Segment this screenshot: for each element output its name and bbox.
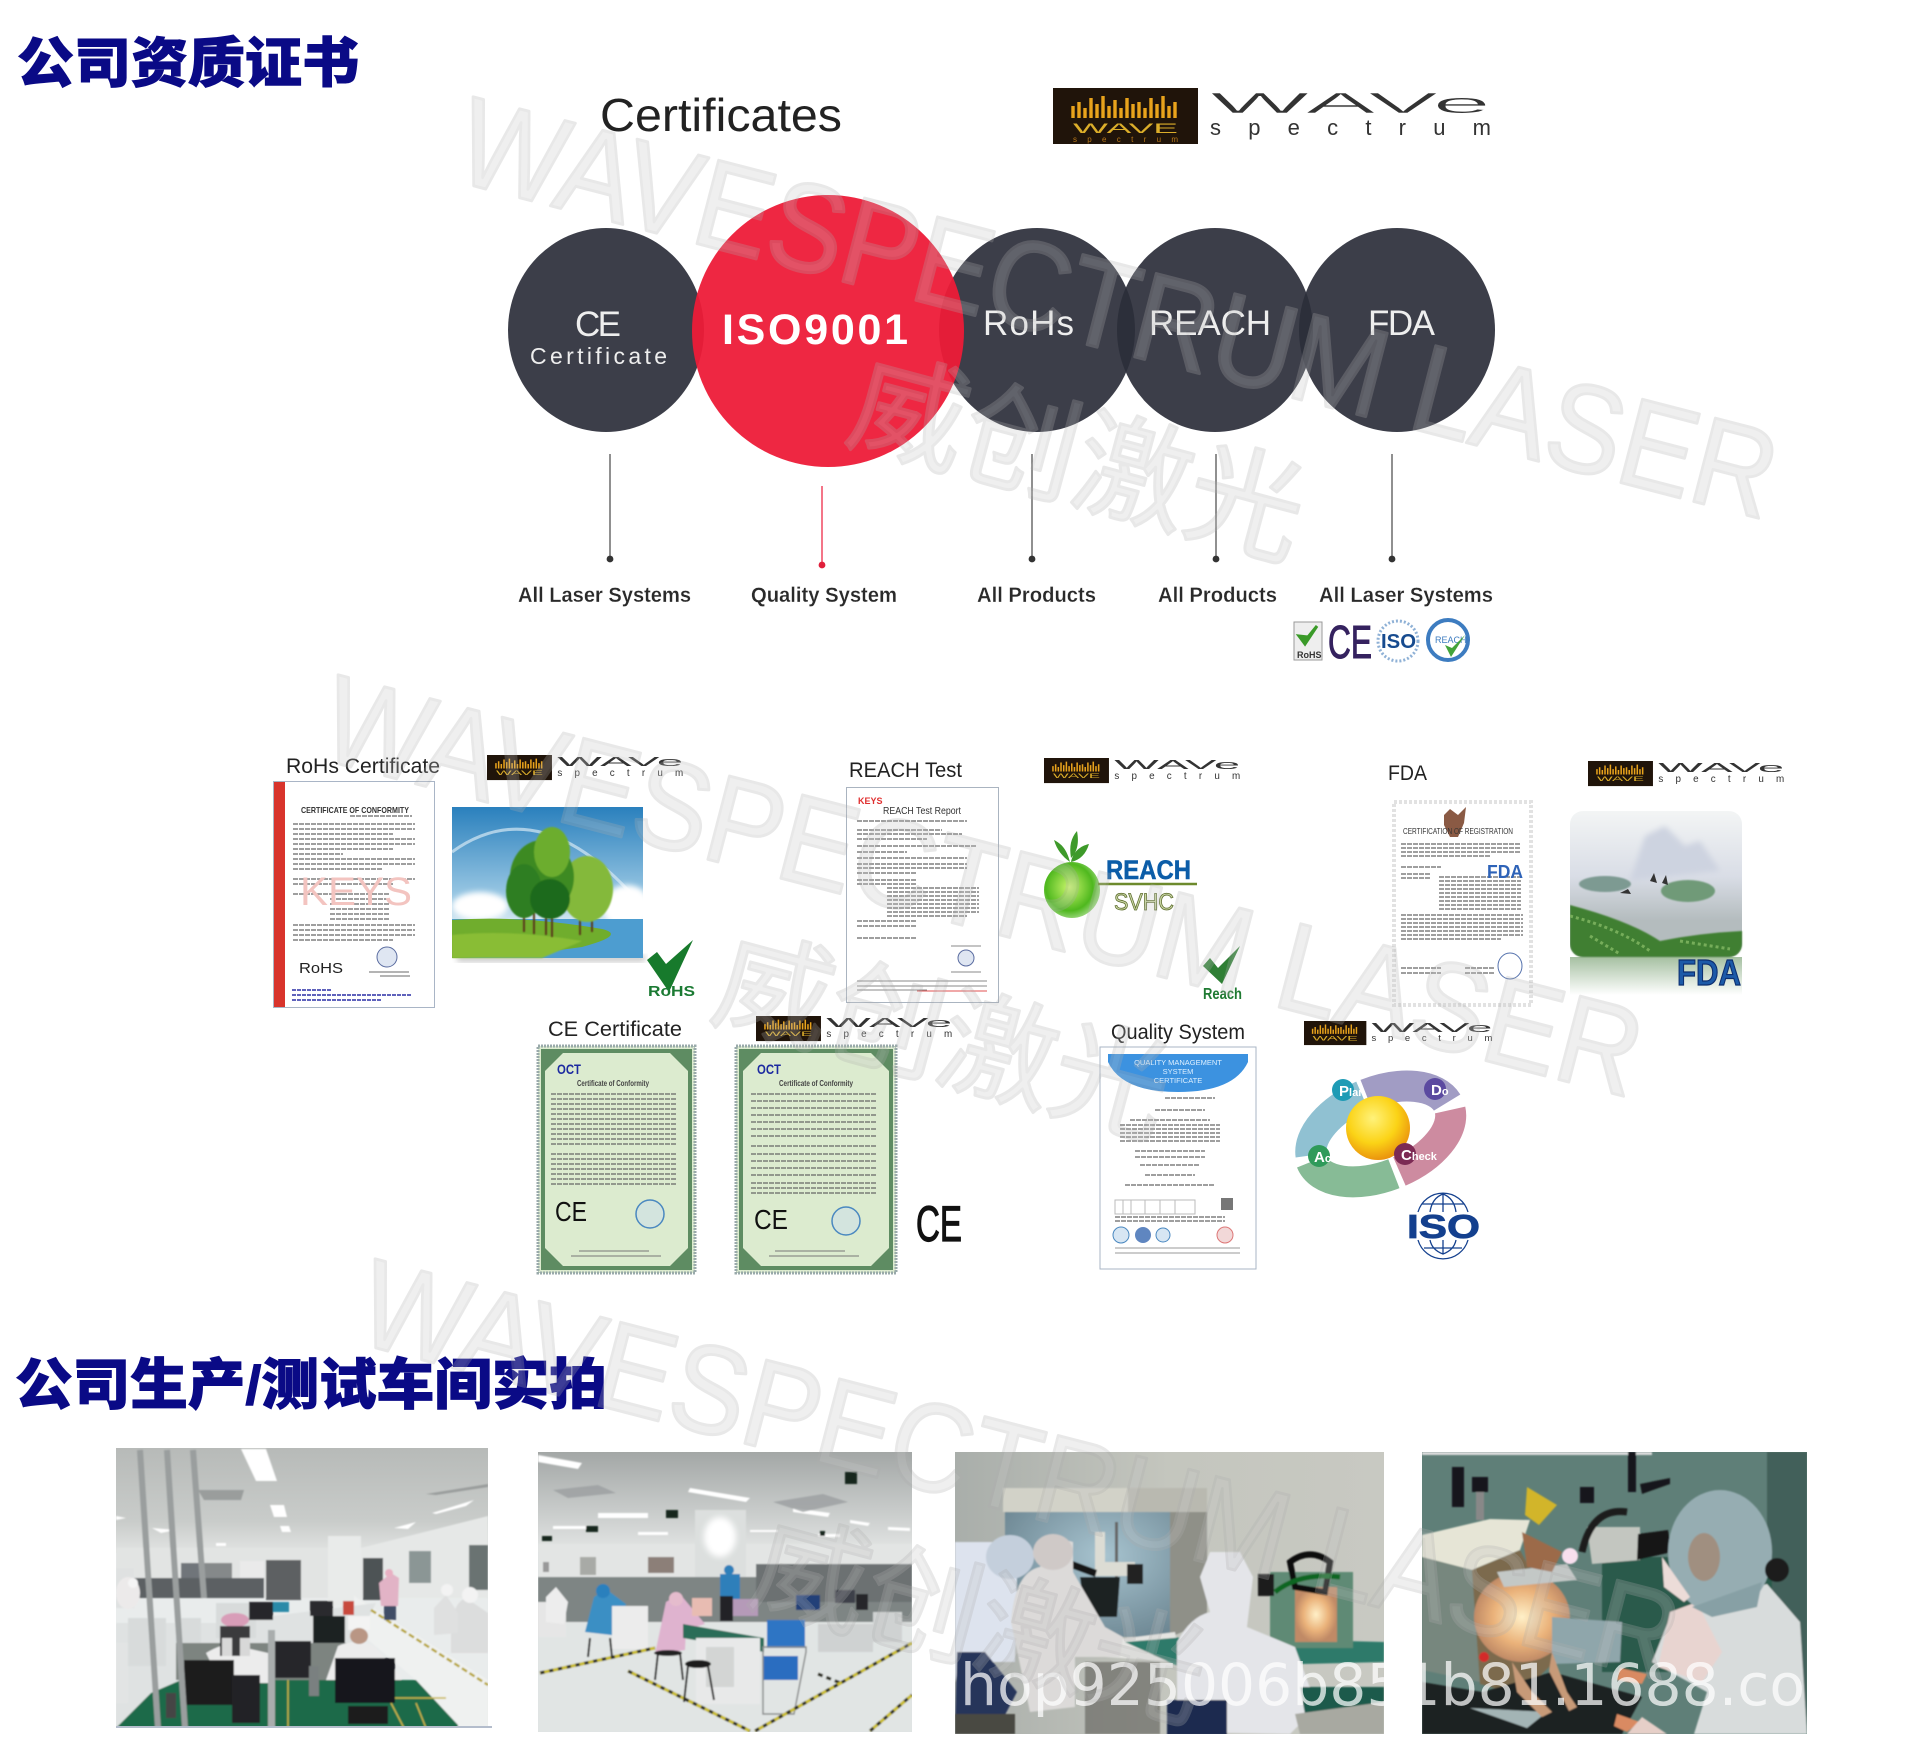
document: CE certificate one: OCT <box>557 1061 581 1077</box>
watermark: middle: WAVESPECTRUM LASER <box>309 650 1657 1124</box>
document: FDA certification of registration: CERTIFICATION OF REGISTRATION <box>1403 827 1513 836</box>
document: quality management system certificate: SYSTEM <box>1163 1067 1193 1076</box>
panel: REACH test <box>846 757 1242 1003</box>
document: CE certificate one: Certificate of Conformity <box>577 1079 649 1088</box>
watermark: top: WAVESPECTRUM LASER <box>444 72 1792 546</box>
document: CE certificate one <box>538 1046 695 1273</box>
photo: operator at laser bench <box>1422 1452 1807 1734</box>
document: CE certificate two <box>736 1046 896 1273</box>
document: RoHS certificate of conformity: KEYS <box>300 870 412 914</box>
icon: RoHS check <box>647 940 695 1000</box>
connector: ISO9001 <box>819 486 825 568</box>
logo: Wave Spectrum quality: WAVE <box>1313 1036 1358 1042</box>
watermark: shop url: hop925006b851b81.1688.co <box>960 1651 1805 1719</box>
logo: Wave Spectrum CE: WAVe <box>826 1015 952 1030</box>
document: RoHS certificate of conformity: RoHS <box>299 960 343 977</box>
circle: CE <box>508 228 704 432</box>
label: Quality System: Quality System <box>751 584 897 607</box>
document: REACH test report <box>846 788 998 1002</box>
logo: Wave Spectrum main: spectrum <box>1210 115 1491 140</box>
circle: REACH <box>1117 228 1313 432</box>
panel: RoHs certificate <box>274 754 695 1008</box>
logo: Wave Spectrum quality: spectrum <box>1372 1033 1492 1044</box>
logo: Wave Spectrum REACH <box>1044 757 1240 783</box>
label: All Laser Systems: All Laser Systems <box>518 584 691 607</box>
document: RoHS certificate of conformity <box>274 782 434 1008</box>
logo: Wave Spectrum main: spectrum <box>1073 135 1178 144</box>
circle: CE: CE <box>575 305 621 344</box>
panel: CE certificate <box>538 1015 962 1273</box>
circle: FDA <box>1299 228 1495 432</box>
document: FDA certification of registration <box>1394 802 1531 1005</box>
title: company certificates heading: 公司资质证书 <box>17 34 359 94</box>
diagram: PDCA cycle: Plan <box>1339 1083 1365 1100</box>
logo: REACH SVHC globe <box>1044 831 1197 918</box>
document: CE certificate two: CE <box>754 1204 788 1235</box>
logo: Wave Spectrum FDA: WAVE <box>1597 776 1644 783</box>
icon: CE mark badge: CE <box>1328 616 1372 668</box>
document: FDA certification of registration: FDA <box>1487 862 1523 882</box>
watermark: middle: 威创激光 <box>702 915 1183 1160</box>
logo: Wave Spectrum FDA: spectrum <box>1658 774 1784 785</box>
chart: certification circles <box>508 195 1495 467</box>
label: All Products (REACH): All Products <box>1158 584 1277 607</box>
heading: FDA: FDA <box>1388 762 1427 785</box>
icon: ISO badge <box>1378 621 1418 661</box>
logo: Wave Spectrum REACH: WAVE <box>1053 773 1100 780</box>
logo: REACH SVHC globe: REACH <box>1106 855 1191 885</box>
connector: FDA <box>1389 454 1395 562</box>
watermark: bottom: WAVESPECTRUM LASER <box>346 1234 1694 1708</box>
diagram: PDCA cycle <box>1296 1067 1464 1201</box>
logo: Wave Spectrum CE: spectrum <box>826 1029 952 1040</box>
circle: ISO9001: ISO9001 <box>722 306 908 354</box>
heading: RoHs Certificate: RoHs Certificate <box>286 755 440 778</box>
logo: Wave Spectrum RoHs <box>487 754 683 780</box>
heading: CE Certificate: CE Certificate <box>548 1018 682 1041</box>
heading: Certificates: Certificates <box>600 89 842 141</box>
diagram: PDCA cycle: Check <box>1401 1147 1438 1164</box>
circle: FDA: FDA <box>1368 304 1436 343</box>
document: CE certificate two: Certificate of Conformity <box>779 1079 853 1088</box>
icon: ISO badge: ISO <box>1381 631 1416 653</box>
logo: Wave Spectrum RoHs: spectrum <box>557 768 683 779</box>
icon row: certification badges <box>1294 616 1468 668</box>
watermark: top: 威创激光 <box>837 337 1318 582</box>
photo: cleanroom workshop right <box>538 1452 912 1732</box>
document: CE certificate two: OCT <box>757 1061 781 1077</box>
watermark: bottom: 威创激光 <box>739 1499 1220 1744</box>
icon: ISO logo: ISO <box>1407 1208 1480 1245</box>
connector: REACH <box>1213 454 1219 562</box>
logo: REACH SVHC globe: SVHC <box>1114 889 1174 916</box>
document: quality management system certificate <box>1100 1047 1256 1269</box>
heading: production and test workshop: 公司生产/测试车间实拍 <box>15 1354 607 1416</box>
circle: RoHs: RoHs <box>983 304 1074 343</box>
connector: RoHs <box>1029 454 1035 562</box>
document: quality management system certificate: QUALITY MANAGEMENT <box>1134 1058 1222 1067</box>
icon: ISO logo <box>1407 1193 1480 1259</box>
photo: technicians at microscopes <box>955 1452 1384 1734</box>
logo: Wave Spectrum quality: WAVe <box>1372 1021 1493 1035</box>
diagram: PDCA cycle: Do <box>1431 1082 1449 1099</box>
icon: RoHS badge: RoHS <box>1297 650 1322 660</box>
document: quality management system certificate: CERTIFICATE <box>1154 1076 1202 1085</box>
circle: REACH: REACH <box>1149 304 1271 343</box>
icon: RoHS badge <box>1294 622 1322 660</box>
label: All Laser Systems (FDA): All Laser Systems <box>1319 584 1493 607</box>
connector: CE <box>607 454 613 562</box>
heading: Quality System: Quality System <box>1111 1021 1245 1044</box>
icon: REACH badge: REACH <box>1435 635 1467 645</box>
logo: Wave Spectrum RoHs: WAVE <box>496 770 543 777</box>
panel: FDA <box>1388 760 1784 1005</box>
logo: Wave Spectrum REACH: spectrum <box>1114 771 1240 782</box>
logo: Wave Spectrum FDA <box>1588 760 1784 786</box>
icon: Reach check: Reach <box>1203 986 1242 1003</box>
document: REACH test report: KEYS <box>858 796 883 806</box>
logo: Wave Spectrum main: WAVe <box>1210 88 1491 120</box>
icon: CE mark: CE <box>916 1196 962 1252</box>
diagram: PDCA cycle: Act <box>1314 1149 1335 1166</box>
circle: CE: Certificate <box>530 343 667 369</box>
logo: Wave Spectrum REACH: WAVe <box>1114 757 1240 772</box>
logo: Wave Spectrum RoHs: WAVe <box>557 754 683 769</box>
icon: Reach check <box>1203 946 1242 1003</box>
heading: REACH Test: REACH Test <box>849 759 962 782</box>
logo: Wave Spectrum CE: WAVE <box>765 1031 812 1038</box>
document: RoHS certificate of conformity: CERTIFICATE OF CONFORMITY <box>301 805 409 815</box>
circle: RoHs <box>939 228 1135 432</box>
logo: Wave Spectrum main: WAVE <box>1073 120 1178 136</box>
logo: Wave Spectrum main <box>1053 88 1491 144</box>
icon: REACH badge <box>1428 620 1468 660</box>
circle: ISO9001 <box>692 195 964 467</box>
label: All Products (RoHs): All Products <box>977 584 1096 607</box>
photo: cleanroom workshop left <box>116 1448 492 1728</box>
logo: Wave Spectrum CE <box>756 1015 952 1041</box>
document: CE certificate one: CE <box>555 1196 587 1227</box>
photo: tree in bubble <box>452 807 648 963</box>
document: REACH test report: REACH Test Report <box>883 806 961 817</box>
icon: RoHS check: RoHS <box>648 983 695 1000</box>
logo: Wave Spectrum FDA: WAVe <box>1658 760 1784 775</box>
photo: misty tea hills with reflection <box>1570 811 1744 992</box>
logo: Wave Spectrum quality <box>1304 1021 1493 1045</box>
panel: quality system <box>1100 1021 1493 1269</box>
icon: FDA logo: FDA <box>1677 952 1741 993</box>
